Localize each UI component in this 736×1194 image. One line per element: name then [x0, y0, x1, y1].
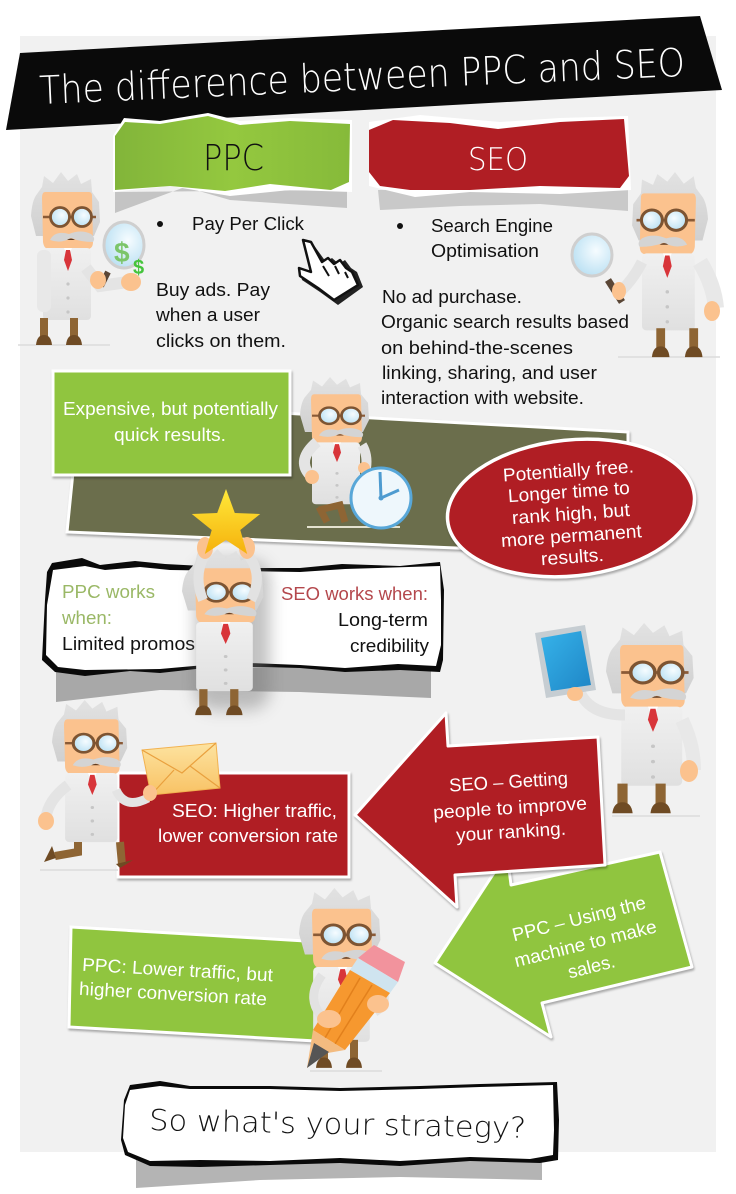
icon: dollar signs: $ [133, 257, 144, 279]
SEO works when text [281, 583, 430, 656]
PPC works when text: when: [61, 607, 112, 628]
arrow: red SEO arrow: people to improve [432, 792, 587, 823]
panel: SEO traffic box [118, 773, 349, 877]
icon: tablet [535, 625, 596, 698]
panel: green quick results box: Expensive, but potentially [63, 398, 279, 419]
panel: PPC heading [113, 113, 352, 213]
character: professor with tablet [535, 623, 700, 816]
SEO description text: Search Engine [431, 215, 553, 236]
icon: clock [351, 468, 411, 528]
icon: dollar signs: $ [114, 237, 130, 268]
icon: star [192, 489, 260, 554]
PPC works when text: Limited promos [62, 633, 195, 654]
PPC works when text [61, 581, 195, 654]
SEO description text: No ad purchase. [382, 286, 522, 307]
icon: hand cursor [299, 240, 363, 305]
panel: PPC conversion box: PPC: Lower traffic, but [82, 954, 273, 985]
callout: red ellipse [441, 427, 701, 589]
SEO works when text: SEO works when: [281, 583, 428, 604]
callout: red ellipse: results. [540, 544, 604, 569]
character: professor with pencil [299, 888, 405, 1071]
PPC description text: when a user [155, 304, 260, 325]
character: professor with magnifier and dollar [18, 172, 144, 345]
PPC description text [155, 213, 305, 351]
panel: green quick results box: quick results. [114, 424, 226, 445]
PPC works when text: PPC works [62, 581, 155, 602]
callout: red ellipse: rank high, but [511, 499, 630, 528]
title banner [6, 16, 722, 130]
icon: pencil [307, 945, 405, 1068]
arrow: red SEO arrow: your ranking. [455, 818, 567, 845]
panel: olive time banner [67, 402, 628, 555]
SEO description text: linking, sharing, and user [382, 362, 597, 383]
character: running professor with envelope [38, 700, 220, 870]
panel: PPC conversion box [69, 927, 322, 1041]
PPC description text: clicks on them. [156, 330, 286, 351]
arrow: red SEO arrow [355, 713, 605, 907]
PPC label: PPC [203, 138, 264, 179]
SEO description text: Organic search results based [381, 311, 629, 332]
SEO description text: on behind-the-scenes [381, 337, 573, 358]
arrow: green PPC arrow: PPC – Using the [510, 892, 648, 945]
panel: SEO heading [369, 115, 631, 211]
SEO label: SEO [468, 142, 528, 178]
panel: SEO traffic box: lower conversion rate [158, 825, 338, 846]
SEO description text: Optimisation [431, 240, 539, 261]
SEO works when text: credibility [350, 635, 430, 656]
panel: closing question [121, 1081, 559, 1188]
callout: red ellipse: more permanent [500, 520, 642, 551]
character: professor with clock [300, 377, 411, 528]
PPC description text: Pay Per Click [192, 213, 305, 234]
SEO description text: interaction with website. [381, 387, 584, 408]
panel: SEO traffic box: SEO: Higher traffic, [172, 800, 337, 821]
arrow: green PPC arrow: sales. [566, 950, 617, 982]
panel: PPC and SEO works when [42, 558, 444, 702]
closing question text: So what's your strategy? [149, 1103, 526, 1145]
panel: green quick results box [53, 371, 290, 475]
arrow: red SEO arrow: SEO – Getting [448, 767, 569, 796]
panel: PPC conversion box: higher conversion rate [79, 978, 267, 1009]
arrow: green PPC arrow [435, 852, 692, 1037]
character: professor holding star [182, 489, 270, 715]
SEO works when text: Long-term [338, 609, 428, 630]
SEO description text [381, 215, 629, 408]
character: professor with magnifier [572, 172, 720, 357]
PPC description text: Buy ads. Pay [156, 279, 271, 300]
callout: red ellipse: Longer time to [507, 477, 630, 506]
callout: red ellipse: Potentially free. [502, 455, 634, 486]
icon: envelope [142, 743, 220, 795]
arrow: green PPC arrow: machine to make [512, 915, 659, 971]
icon: dollar signs [114, 237, 144, 279]
